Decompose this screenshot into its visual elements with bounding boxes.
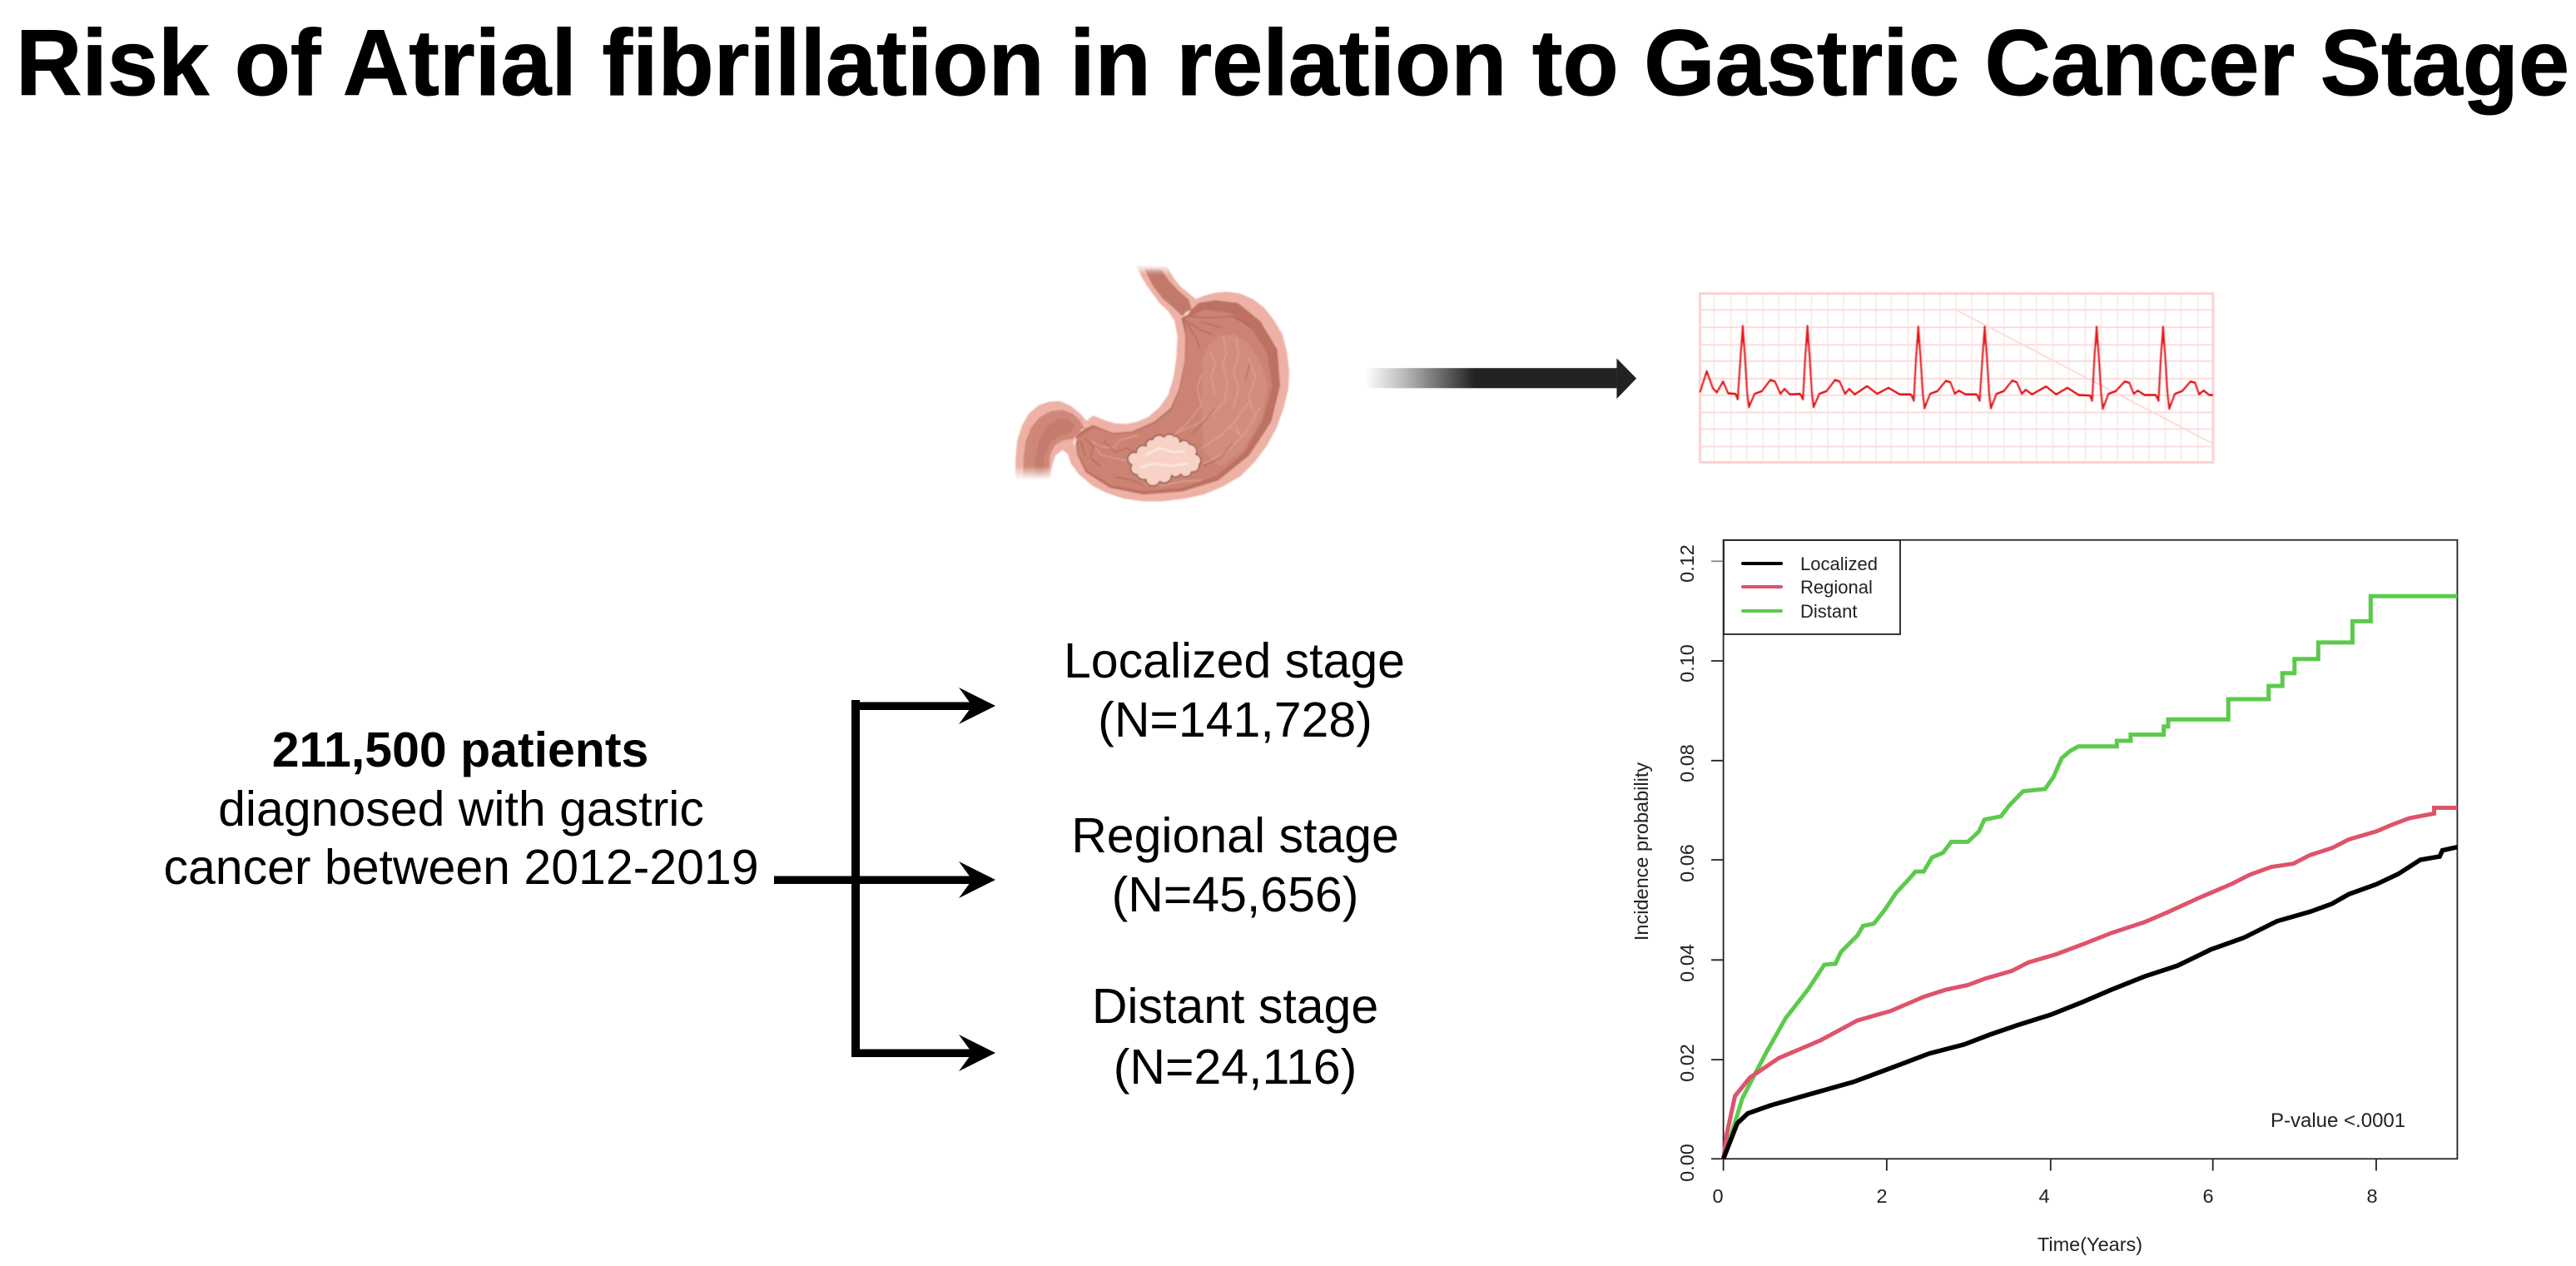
ECG trace <box>1700 326 2213 409</box>
label: distant stage: Distant stage <box>1092 979 1378 1034</box>
legend: Regional <box>1800 577 1873 598</box>
y-axis title: Incidence probability <box>1630 762 1652 941</box>
y-axis tick labels: 0.02 <box>1676 1044 1698 1082</box>
label: distant stage: (N=24,116) <box>1114 1040 1357 1095</box>
icon: ECG strip <box>1700 294 2213 462</box>
curve: distant <box>1724 596 2457 1159</box>
label: localized stage: (N=141,728) <box>1098 693 1372 747</box>
curve: regional <box>1724 808 2457 1159</box>
text block: patient summary: diagnosed with gastric <box>218 782 704 837</box>
text block: patient summary: 211,500 patients <box>272 722 648 777</box>
arrowhead: localized <box>959 688 995 724</box>
y-axis tick labels: 0.12 <box>1676 544 1698 583</box>
title: Risk of Atrial fibrillation in relation to Gastric Cancer Stage <box>16 11 2569 115</box>
arrowhead: distant <box>959 1035 995 1071</box>
x-axis tick labels: 4 <box>2038 1185 2050 1207</box>
chart: cumulative incidence curves <box>1630 540 2457 1255</box>
legend <box>1724 540 1900 634</box>
y-axis tick labels: 0.08 <box>1676 744 1698 782</box>
y-axis tick labels <box>1676 544 1698 1182</box>
x-axis tick labels: 6 <box>2202 1185 2214 1207</box>
plot frame and ticks <box>1711 540 2457 1170</box>
y-axis tick labels: 0.04 <box>1676 944 1698 982</box>
x-axis tick labels: 0 <box>1712 1185 1724 1207</box>
legend: Distant <box>1800 601 1857 622</box>
label: regional stage: (N=45,656) <box>1112 867 1358 922</box>
icon: stomach with tumor <box>1013 264 1288 501</box>
text block: patient summary: cancer between 2012-2019 <box>163 840 759 895</box>
flow diagram: branching arrows <box>774 688 995 1071</box>
tumor <box>1128 434 1201 486</box>
arrow: stomach to ECG <box>1365 358 1636 399</box>
legend: Localized <box>1800 554 1878 574</box>
p-value note: P-value <.0001 <box>2271 1110 2405 1132</box>
label: regional stage <box>1071 808 1399 922</box>
curve: localized <box>1724 847 2457 1159</box>
y-axis tick labels: 0.10 <box>1676 644 1698 683</box>
label: localized stage <box>1064 633 1405 747</box>
y-axis tick labels: 0.00 <box>1676 1144 1698 1182</box>
x-axis tick labels: 2 <box>1876 1185 1888 1207</box>
label: regional stage: Regional stage <box>1071 808 1399 863</box>
label: localized stage: Localized stage <box>1064 633 1405 688</box>
label: distant stage <box>1092 979 1378 1095</box>
x-axis tick labels <box>1712 1185 2378 1207</box>
arrowhead: regional <box>959 861 995 898</box>
x-axis title: Time(Years) <box>2037 1234 2142 1255</box>
y-axis tick labels: 0.06 <box>1676 844 1698 882</box>
x-axis tick labels: 8 <box>2366 1185 2378 1207</box>
text block: patient summary <box>163 722 759 895</box>
